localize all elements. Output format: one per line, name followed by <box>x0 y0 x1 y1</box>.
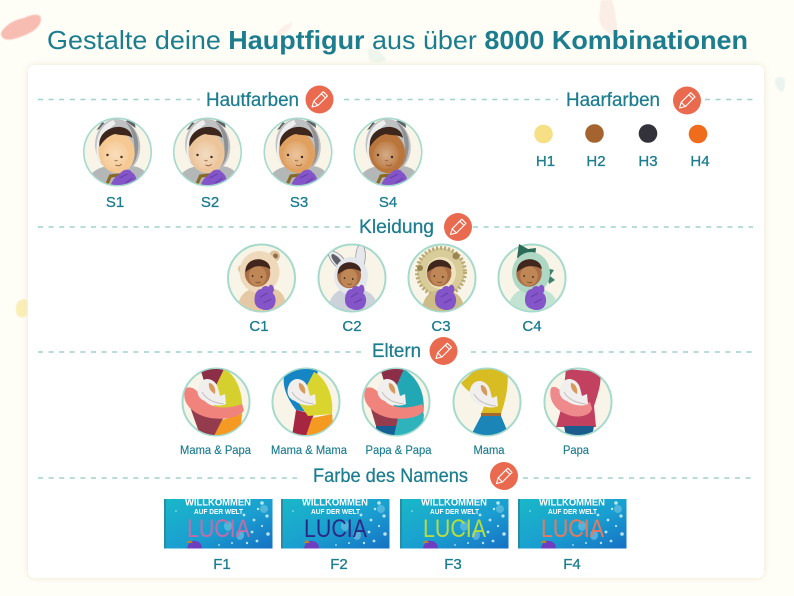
hair swatch H4 <box>689 125 707 143</box>
label H3: H3 <box>638 153 658 170</box>
skin option S4 <box>354 116 422 186</box>
icon: pencil Farbe des Namens <box>490 462 518 490</box>
label C4: C4 <box>522 318 542 335</box>
parent option Papa und Papa <box>362 368 430 436</box>
name colour banner F2: LUCIA <box>304 515 367 543</box>
name colour banner F2 <box>281 498 390 548</box>
label H2: H2 <box>586 153 606 170</box>
label Mama: Mama <box>474 445 505 457</box>
label H1: H1 <box>536 153 555 170</box>
name colour banner F4: WILLKOMMEN <box>539 498 605 508</box>
label S1: S1 <box>106 194 124 211</box>
label Papa und Papa: Papa & Papa <box>366 445 432 457</box>
label Mama und Mama: Mama & Mama <box>271 445 348 457</box>
icon: pencil Kleidung <box>444 213 472 241</box>
hair swatch H2 <box>585 124 604 143</box>
label F4: F4 <box>563 556 581 573</box>
icon: pencil Hautfarben <box>306 86 334 114</box>
skin option S2 <box>174 116 241 186</box>
label S2: S2 <box>201 194 219 211</box>
clothing option C3 lion <box>408 244 476 312</box>
label F2: F2 <box>330 556 348 573</box>
label H4: H4 <box>690 153 710 170</box>
name colour banner F2: AUF DER WELT <box>311 509 361 516</box>
skin option S1 <box>84 116 151 186</box>
hair swatch H3 <box>639 124 657 143</box>
name colour banner F1: LUCIA <box>187 515 250 543</box>
label F1: F1 <box>213 556 231 573</box>
icon: pencil Haarfarben <box>673 86 701 114</box>
name colour banner F3: LUCIA <box>423 515 486 543</box>
skin option S3 <box>264 116 332 186</box>
clothing option C2 bunny <box>318 244 386 312</box>
panel: options card <box>28 65 764 578</box>
name colour banner F1 <box>164 498 272 548</box>
label S4: S4 <box>379 194 397 211</box>
name colour banner F3: WILLKOMMEN <box>421 498 487 508</box>
heading: Eltern: Eltern <box>372 341 421 362</box>
heading: Hautfarben: Hautfarben <box>206 90 299 111</box>
decorative paint blotches <box>1 0 785 317</box>
name colour banner F1: AUF DER WELT <box>194 509 244 516</box>
name colour banner F3 <box>400 498 508 548</box>
heading: Haarfarben: Haarfarben <box>566 90 660 111</box>
clothing option C1 bear <box>228 244 295 312</box>
heading: Kleidung: Kleidung <box>359 217 434 238</box>
clothing option C4 dino <box>498 244 566 312</box>
label C1: C1 <box>249 318 269 335</box>
section: Eltern <box>38 337 753 457</box>
name colour banner F3: AUF DER WELT <box>430 509 480 516</box>
name colour banner F4 <box>518 498 626 548</box>
icon: pencil Eltern <box>430 337 458 365</box>
hair swatch H1 <box>534 125 553 143</box>
label C2: C2 <box>342 318 362 335</box>
section: Kleidung <box>38 213 753 335</box>
parent option Mama und Mama <box>272 368 340 436</box>
section: Farbe des Namens <box>38 462 753 573</box>
label F3: F3 <box>444 556 462 573</box>
parent option Papa <box>544 368 612 436</box>
label C3: C3 <box>431 318 451 335</box>
name colour banner F4: LUCIA <box>541 515 604 543</box>
name colour banner F4: AUF DER WELT <box>548 509 598 516</box>
section: Haarfarben <box>534 86 753 170</box>
parent option Mama <box>454 368 520 436</box>
label Papa: Papa <box>563 445 590 457</box>
name colour banner F1: WILLKOMMEN <box>185 498 251 508</box>
name colour banner F2: WILLKOMMEN <box>302 498 368 508</box>
section: Hautfarben <box>38 86 558 211</box>
parent option Mama und Papa <box>182 368 250 436</box>
label Mama und Papa: Mama & Papa <box>180 445 252 457</box>
heading: Farbe des Namens: Farbe des Namens <box>313 466 468 487</box>
title: Gestalte deine Hauptfigur aus über 8000 Kombinationen <box>47 25 748 55</box>
label S3: S3 <box>290 194 308 211</box>
